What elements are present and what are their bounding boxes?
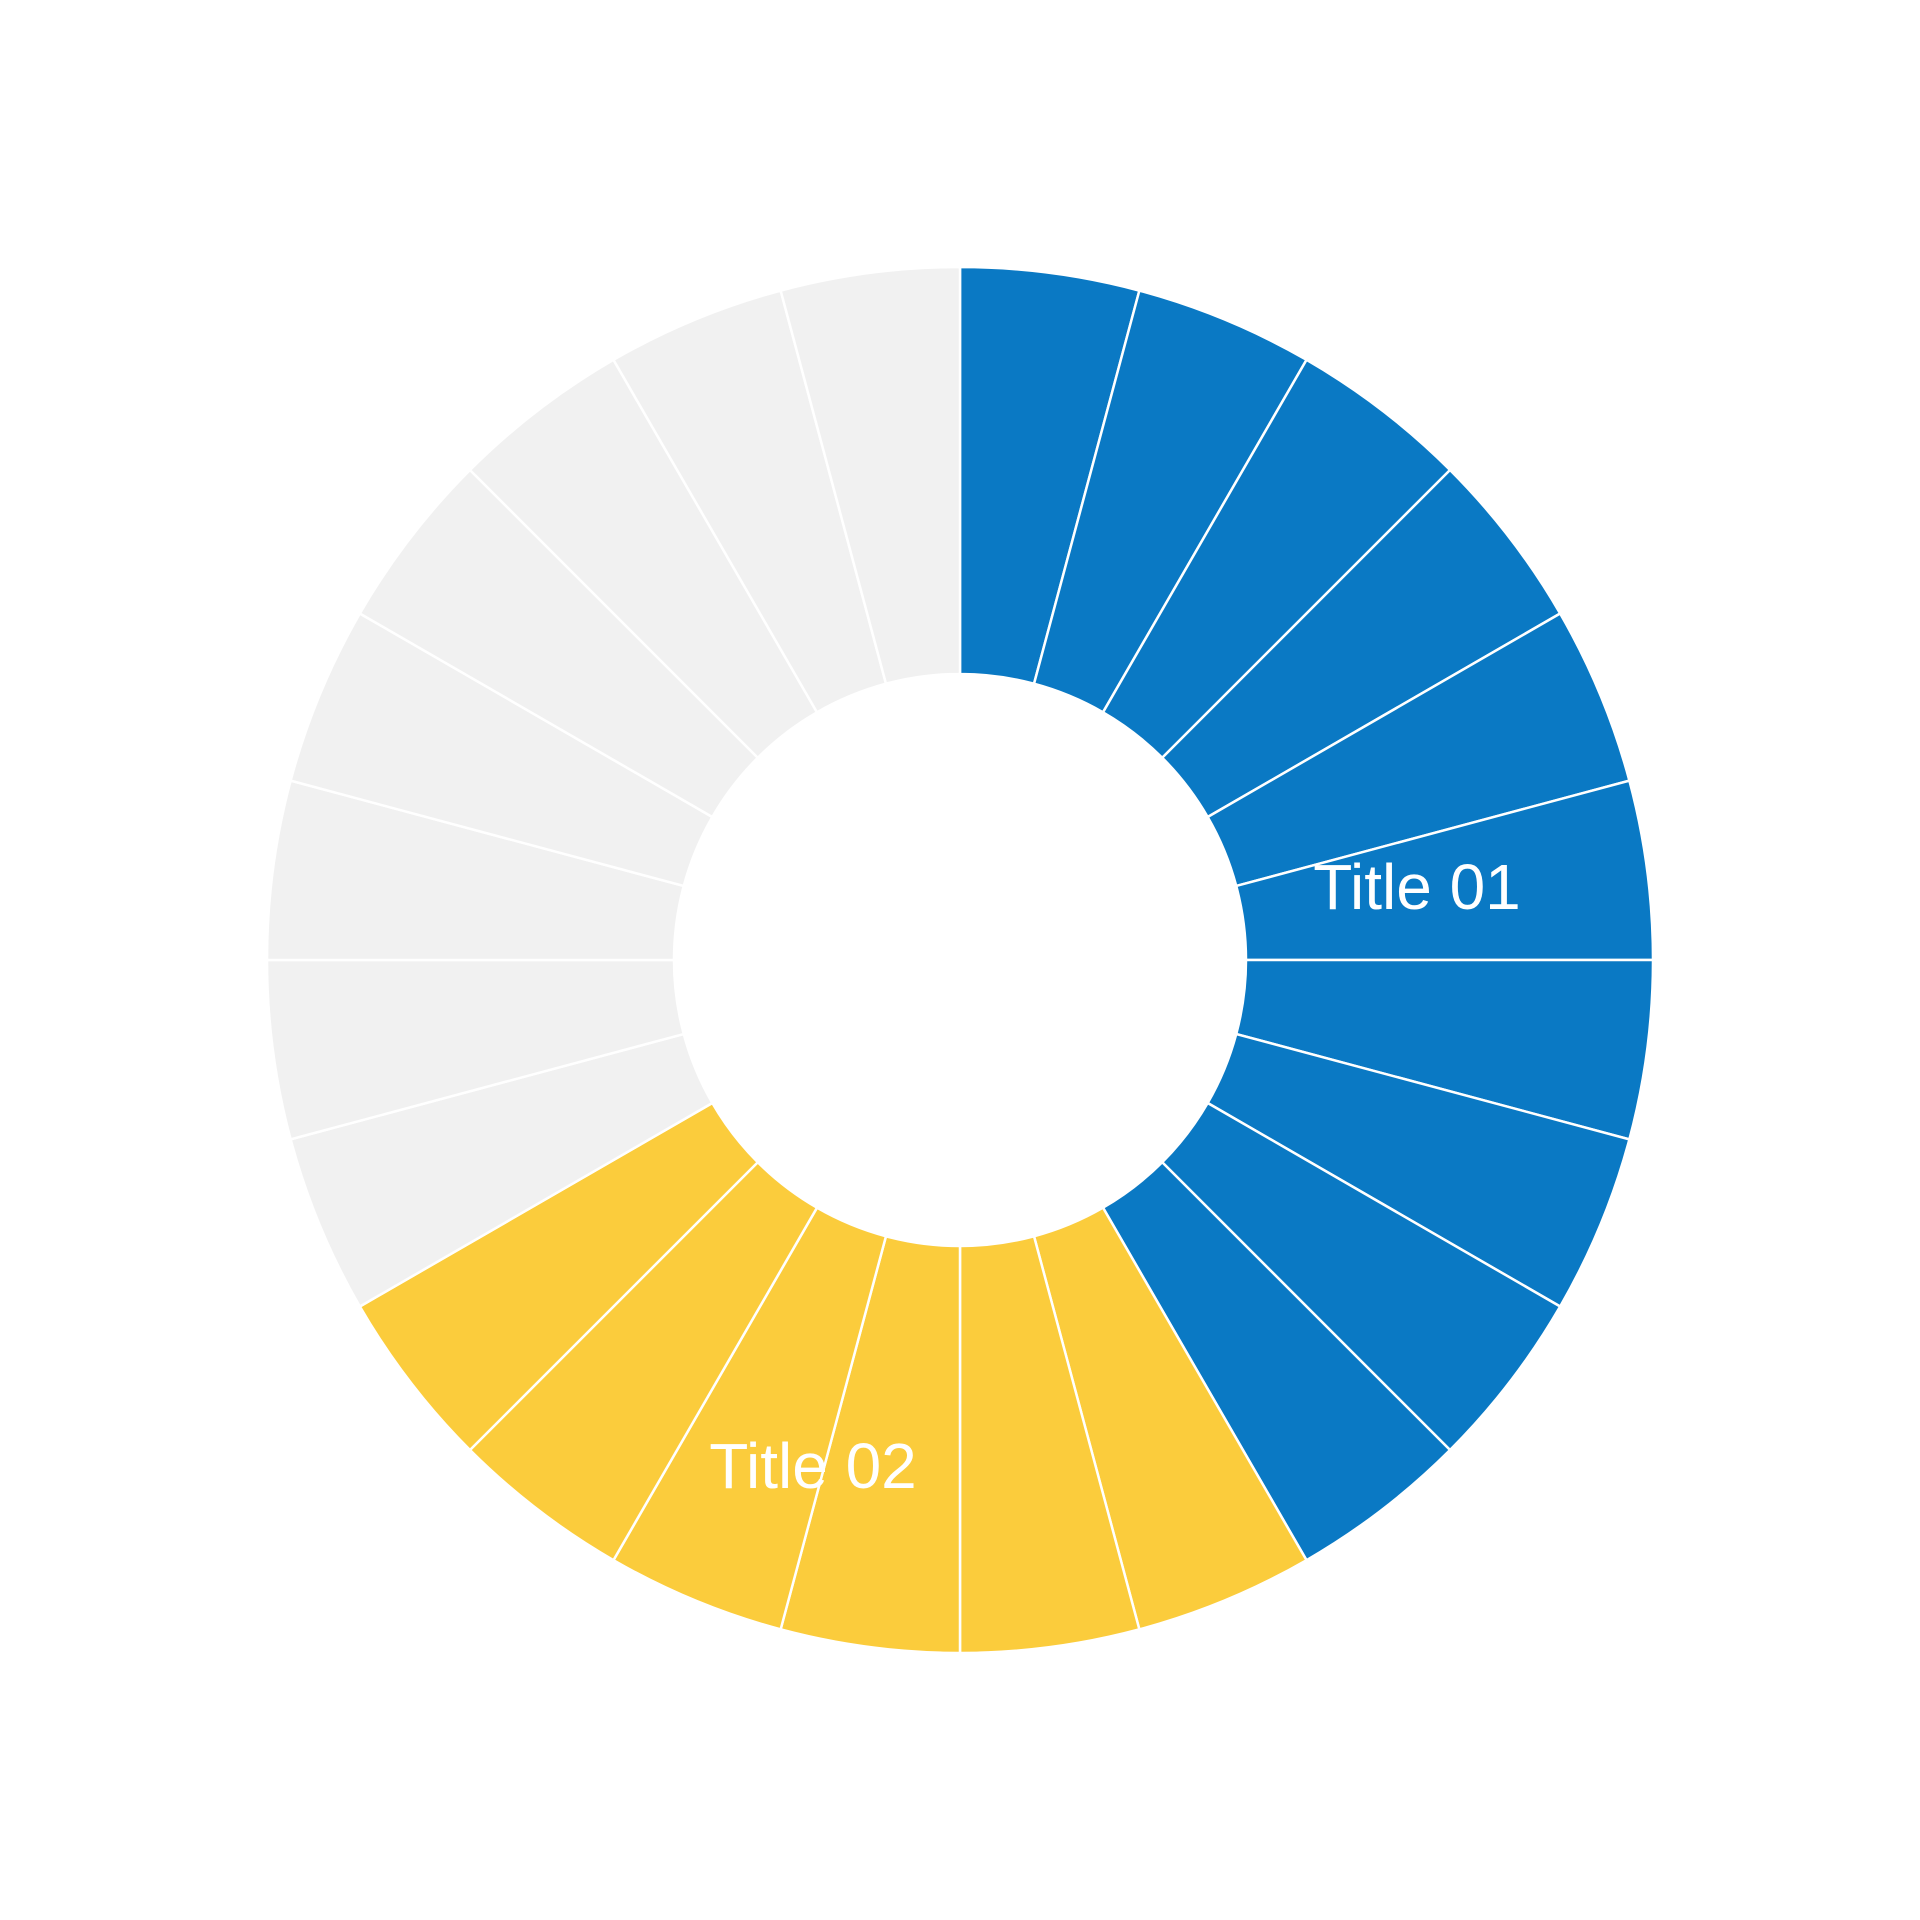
label: Title 02: Title 02	[709, 1430, 917, 1502]
label: Title 01: Title 01	[1313, 851, 1521, 923]
yellow segments	[343, 1029, 1307, 1676]
blue segments	[960, 267, 1676, 1577]
gray segments	[244, 244, 1062, 1307]
